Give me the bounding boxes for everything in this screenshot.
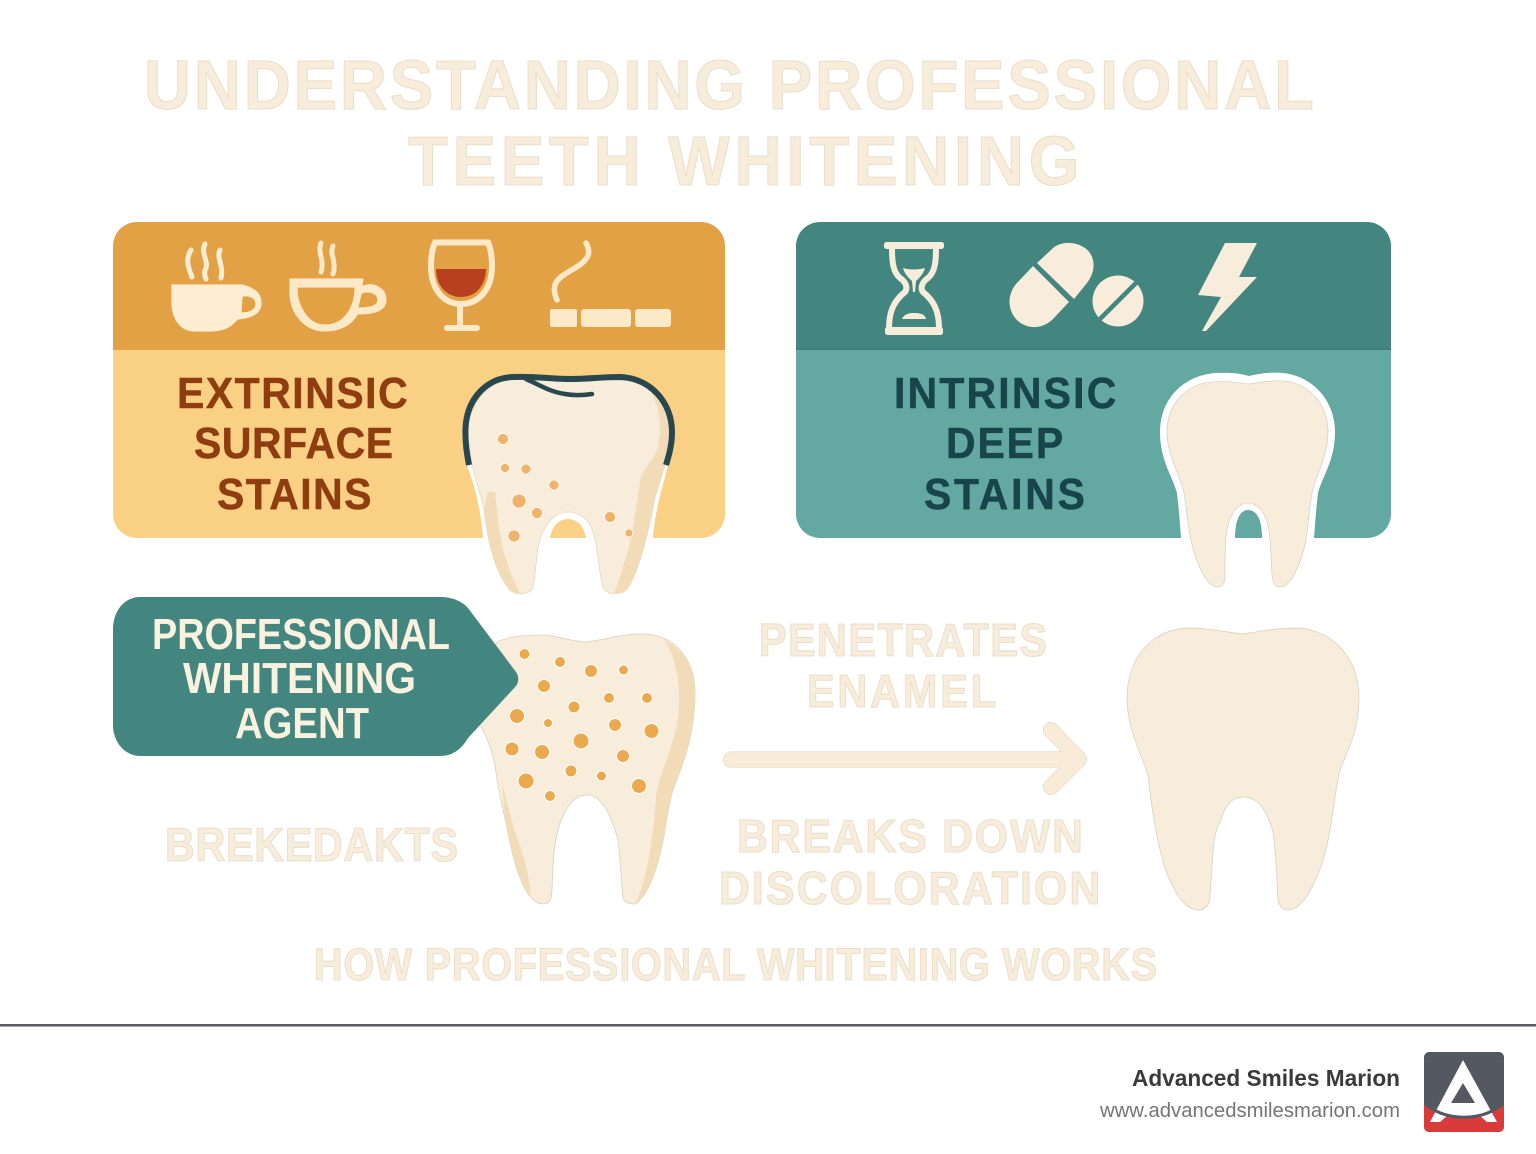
- label: penetrates enamel: [759, 615, 1047, 718]
- panel label: extrinsic surface stains: SURFACE: [194, 420, 393, 468]
- footer divider: [0, 1024, 1536, 1026]
- title: TEETH WHITENING: [408, 123, 1079, 201]
- title: UNDERSTANDING PROFESSIONAL: [144, 47, 1314, 125]
- label: penetrates enamel: PENETRATES: [759, 615, 1047, 667]
- panel label: intrinsic deep stains: DEEP: [946, 420, 1063, 468]
- footer brand text: [1099, 1065, 1400, 1122]
- panel label: extrinsic surface stains: STAINS: [217, 471, 371, 519]
- label: breaks down discoloration: BREAKS DOWN: [737, 812, 1083, 862]
- icon: capsule and tablet: [1009, 243, 1144, 327]
- panel label: intrinsic deep stains: INTRINSIC: [894, 370, 1116, 418]
- label: breaks down discoloration: DISCOLORATION: [719, 864, 1100, 914]
- arrow: whitening progress: [731, 730, 1079, 787]
- callout: professional whitening agent: AGENT: [235, 699, 369, 748]
- icon: lightning bolt: [1198, 243, 1257, 331]
- callout: professional whitening agent: [113, 597, 518, 756]
- icon: cigarette with smoke: [550, 243, 671, 327]
- label: penetrates enamel: ENAMEL: [807, 666, 996, 718]
- tooth: whitening agent with stain dots: [470, 634, 695, 904]
- label: breaks down discoloration: [719, 812, 1100, 914]
- callout: professional whitening agent: WHITENING: [183, 654, 416, 703]
- icon: hourglass: [884, 242, 944, 335]
- tooth: intrinsic clean: [1160, 373, 1335, 587]
- icon: brand logo: [1424, 1052, 1504, 1132]
- caption: how professional whitening works: HOW PROFESSIONAL WHITENING WORKS: [314, 940, 1157, 990]
- tooth: extrinsic stained: [465, 377, 672, 594]
- footer brand text: www.advancedsmilesmarion.com: [1099, 1100, 1400, 1122]
- icon: wine glass: [431, 242, 492, 331]
- panel label: extrinsic surface stains: [177, 370, 408, 519]
- icon: filled coffee cup: [171, 244, 262, 332]
- label: brekedakts: BREKEDAKTS: [165, 820, 458, 872]
- panel label: intrinsic deep stains: [894, 370, 1116, 519]
- panel label: intrinsic deep stains: STAINS: [924, 471, 1085, 519]
- tooth: whitened result: [1127, 628, 1359, 910]
- footer brand text: Advanced Smiles Marion: [1132, 1065, 1400, 1091]
- icon: outlined coffee cup: [289, 243, 387, 332]
- panel label: extrinsic surface stains: EXTRINSIC: [177, 370, 408, 418]
- title: [144, 47, 1314, 201]
- panel: intrinsic deep stains: [796, 222, 1391, 538]
- panel: extrinsic surface stains: [113, 222, 725, 538]
- callout: professional whitening agent: PROFESSIONAL: [152, 610, 450, 659]
